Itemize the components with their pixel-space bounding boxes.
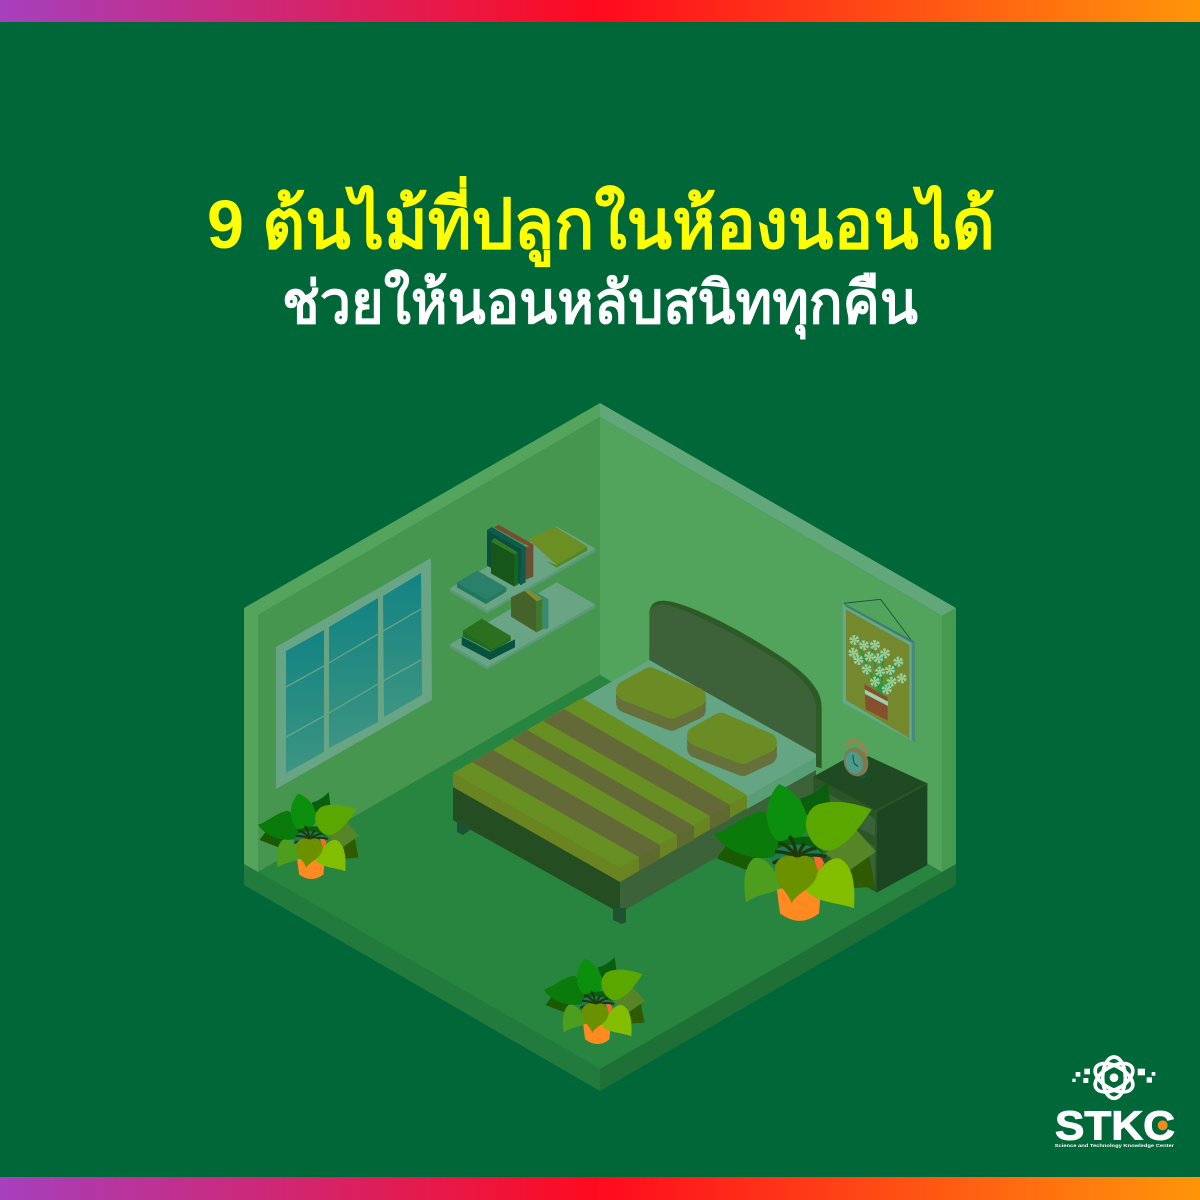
bedside table [813, 752, 927, 893]
top gradient bar [0, 0, 1200, 22]
room shell [244, 403, 956, 1091]
alarm clock [840, 741, 872, 780]
striped blanket [453, 698, 747, 882]
bed frame [453, 770, 816, 924]
plant: left corner [258, 792, 359, 879]
mattress sheet [580, 660, 816, 809]
icon: orange dot [1158, 1120, 1168, 1130]
plant: front corner [544, 957, 645, 1044]
window [276, 558, 432, 789]
subtitle: ช่วยให้นอนหลับสนิททุกคืน [282, 268, 918, 340]
bottom gradient bar [0, 1177, 1200, 1200]
bed [453, 601, 822, 924]
icon: atom [1072, 1057, 1155, 1098]
wall shelves with books [450, 525, 595, 669]
isometric bedroom [244, 403, 956, 1091]
tagline: Science and Technology Knowledge Center [1055, 1143, 1174, 1148]
headboard [649, 601, 822, 768]
logo: STKC [1055, 1057, 1175, 1148]
wordmark: STKC [1055, 1102, 1175, 1148]
plant: large by the bed [714, 782, 876, 921]
framed picture of flowers [843, 599, 915, 742]
title: 9 ต้นไม้ที่ปลูกในห้องนอนได้ [207, 175, 995, 268]
pillows [626, 677, 767, 766]
